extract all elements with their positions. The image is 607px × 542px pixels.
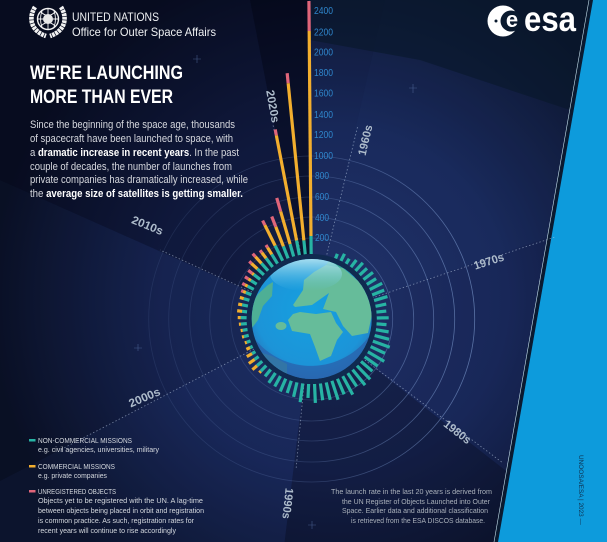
intro text: couple of decades, the number of launches from	[30, 161, 232, 173]
ESA logo: e	[506, 7, 518, 32]
legend: commercial missions: e.g. private companies	[38, 471, 107, 480]
legend: unregistered objects: between objects being placed in orbit and registration	[38, 506, 204, 515]
white edge line	[494, 0, 589, 542]
star markers	[134, 55, 417, 529]
launch bars: non-commercial missions	[241, 236, 390, 403]
scale labels: 200	[315, 233, 329, 244]
decade labels: 2000s	[127, 386, 162, 410]
scale labels: 2400	[314, 6, 333, 17]
decade labels: 1960s	[357, 124, 375, 157]
scale labels	[314, 6, 333, 244]
decade labels: 1990s	[279, 487, 295, 519]
source note	[331, 487, 492, 525]
scale labels: 800	[315, 171, 329, 182]
intro text: Since the beginning of the space age, thousands	[30, 119, 235, 131]
scale labels: 1200	[314, 130, 333, 141]
dark band beside the blue edge	[494, 0, 593, 542]
source note: The launch rate in the last 20 years is derived from	[331, 487, 492, 496]
launch bars: commercial missions	[237, 31, 311, 373]
title	[30, 63, 183, 108]
scale rings	[149, 156, 475, 482]
source note: is retrieved from the ESA DISCOS database.	[351, 516, 485, 525]
legend: commercial missions	[29, 462, 115, 480]
scale labels: 2200	[314, 28, 333, 38]
ESA logo: esa	[524, 0, 576, 39]
legend: commercial missions: COMMERCIAL MISSIONS	[38, 462, 115, 471]
source note: Space. Earlier data and additional classification	[342, 506, 488, 515]
right blue band	[498, 0, 607, 542]
decade labels: 2010s	[130, 214, 165, 238]
decade divider lines	[60, 125, 555, 470]
scale labels: 1000	[314, 151, 333, 162]
legend: non-commercial missions	[29, 436, 159, 454]
decade labels: 1980s	[441, 418, 473, 447]
legend: non-commercial missions: e.g. civil agencies, universities, military	[38, 445, 159, 454]
legend: unregistered objects	[29, 487, 204, 535]
decade labels: 1970s	[472, 252, 506, 273]
legend: unregistered objects: UNREGISTERED OBJECTS	[38, 487, 116, 496]
continent: Americas south	[262, 353, 287, 374]
UN emblem	[31, 7, 65, 36]
scale labels: 1400	[314, 110, 333, 121]
continent: Arctic land	[326, 262, 354, 276]
continent: Eurasia	[293, 265, 373, 336]
top edge vignette	[310, 0, 589, 110]
decade labels: 2020s	[263, 89, 281, 124]
continent: Americas north	[251, 282, 273, 328]
continent: Africa	[288, 312, 343, 361]
UN name	[72, 10, 216, 39]
decade labels	[127, 89, 506, 519]
scale labels: 1600	[314, 88, 333, 100]
intro text: the average size of satellites is getting smaller.	[30, 188, 243, 200]
scale labels: 600	[315, 192, 329, 203]
source note: the UN Register of Objects Launched into Outer	[342, 497, 490, 506]
UN name: Office for Outer Space Affairs	[72, 25, 216, 39]
UN name: UNITED NATIONS	[72, 10, 159, 24]
ESA logo	[488, 0, 576, 39]
globe	[247, 254, 377, 384]
legend: unregistered objects: Objects yet to be registered with the UN. A lag-time	[38, 496, 203, 505]
credit: UNOOSA/ESA | 2023 —	[577, 455, 584, 525]
intro text: private companies has dramatically increased, while	[30, 174, 248, 186]
title: MORE THAN EVER	[30, 87, 173, 108]
globe highlight	[270, 259, 342, 287]
scale labels: 2000	[314, 48, 333, 58]
globe shadow	[254, 335, 370, 381]
legend: unregistered objects: recent years will continue to rise accordingly	[38, 526, 176, 535]
intro text: a dramatic increase in recent years. In the past	[30, 147, 239, 159]
legend: unregistered objects: is common practice. As such, registration rates for	[38, 516, 194, 525]
intro text	[30, 119, 248, 200]
title: WE'RE LAUNCHING	[30, 63, 183, 84]
island	[276, 322, 286, 330]
launch bars: unregistered objects	[241, 1, 309, 291]
scale labels: 400	[315, 213, 329, 224]
intro text: of spacecraft have been launched to space, with	[30, 133, 233, 145]
scale labels: 1800	[314, 68, 333, 79]
legend: non-commercial missions: NON-COMMERCIAL MISSIONS	[38, 436, 132, 445]
